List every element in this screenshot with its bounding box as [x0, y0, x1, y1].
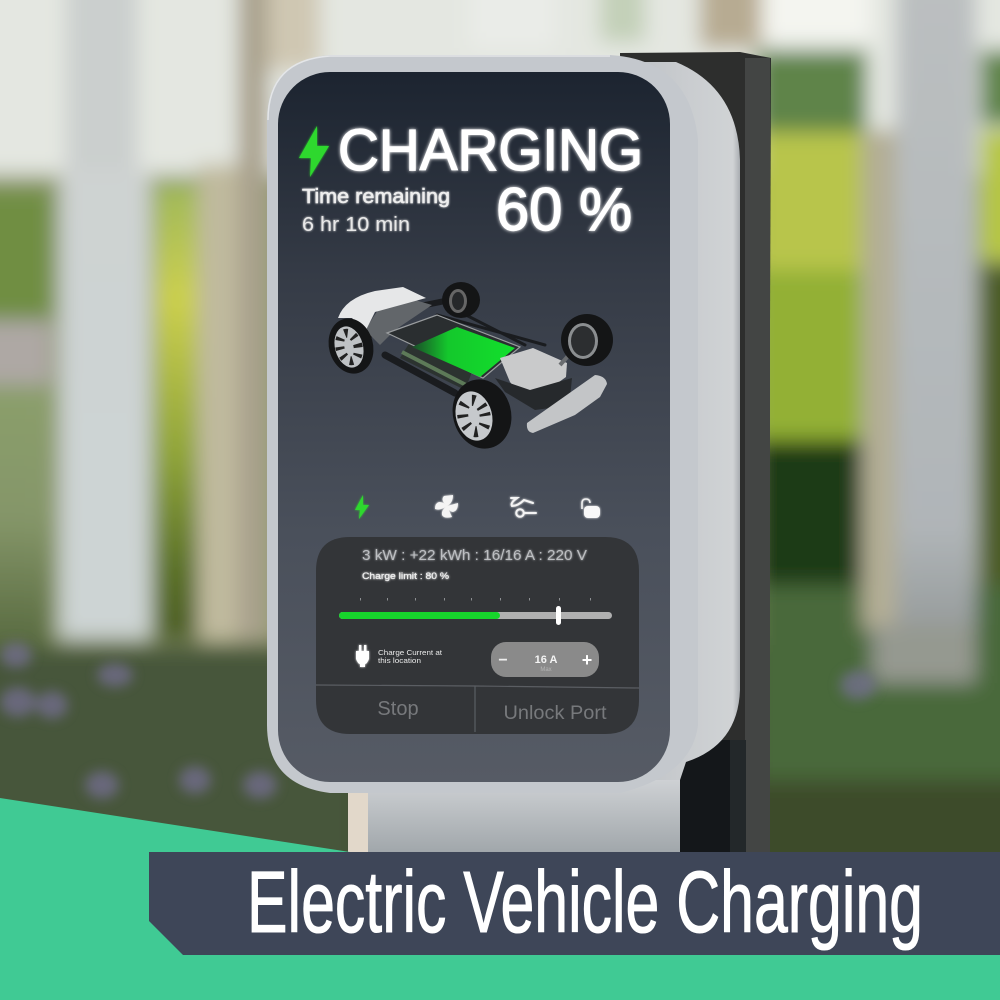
rear subframe [365, 300, 432, 345]
current stepper [491, 642, 599, 677]
text: charge current label: Charge Current at [378, 648, 442, 657]
text: time remaining value: 6 hr 10 min [302, 213, 410, 236]
button: Stop: Stop [377, 698, 419, 720]
wheel: front right [561, 314, 613, 366]
panel dividers [316, 685, 639, 732]
status icon: fan [435, 495, 458, 518]
icon: plug [356, 645, 369, 667]
heading: CHARGING: CHARGING [338, 118, 643, 183]
current stepper: 16 A [535, 654, 557, 666]
icon: green lightning bolt [299, 126, 329, 177]
status icon: cable [511, 498, 536, 517]
current stepper: − [498, 652, 508, 669]
wheel: rear left [323, 313, 379, 379]
rear white body panel [338, 287, 426, 332]
status icon: charging bolt [355, 495, 369, 519]
text: charge current label: this location [378, 656, 421, 665]
front bumper [527, 375, 607, 433]
title banner [149, 852, 1000, 955]
current stepper: + [582, 650, 592, 670]
car chassis illustration [323, 282, 613, 455]
charge slider [339, 606, 612, 625]
charger mounting post [620, 52, 771, 852]
chassis rails [370, 300, 545, 393]
text: charge current label [378, 648, 442, 665]
text: charge limit: Charge limit : 80 % [362, 571, 449, 581]
screen [278, 72, 670, 782]
control panel [316, 537, 639, 734]
slider ticks [360, 598, 591, 600]
lower white pedestal [348, 780, 680, 852]
text: 60 percent: 60 % [496, 176, 632, 243]
current stepper: Max [540, 667, 552, 673]
battery pack [412, 327, 515, 377]
text: time remaining label: Time remaining [302, 185, 450, 208]
front motor assembly [500, 348, 567, 400]
green corner banner [0, 798, 1000, 1000]
charger housing [267, 55, 740, 793]
status icon: open padlock [582, 499, 600, 518]
wheel: front left [445, 373, 519, 455]
battery tray [387, 315, 520, 378]
wheel: rear right [442, 282, 480, 318]
button: Unlock Port: Unlock Port [504, 703, 607, 724]
text: power readout: 3 kW : +22 kWh : 16/16 A : 220 V [362, 548, 587, 564]
